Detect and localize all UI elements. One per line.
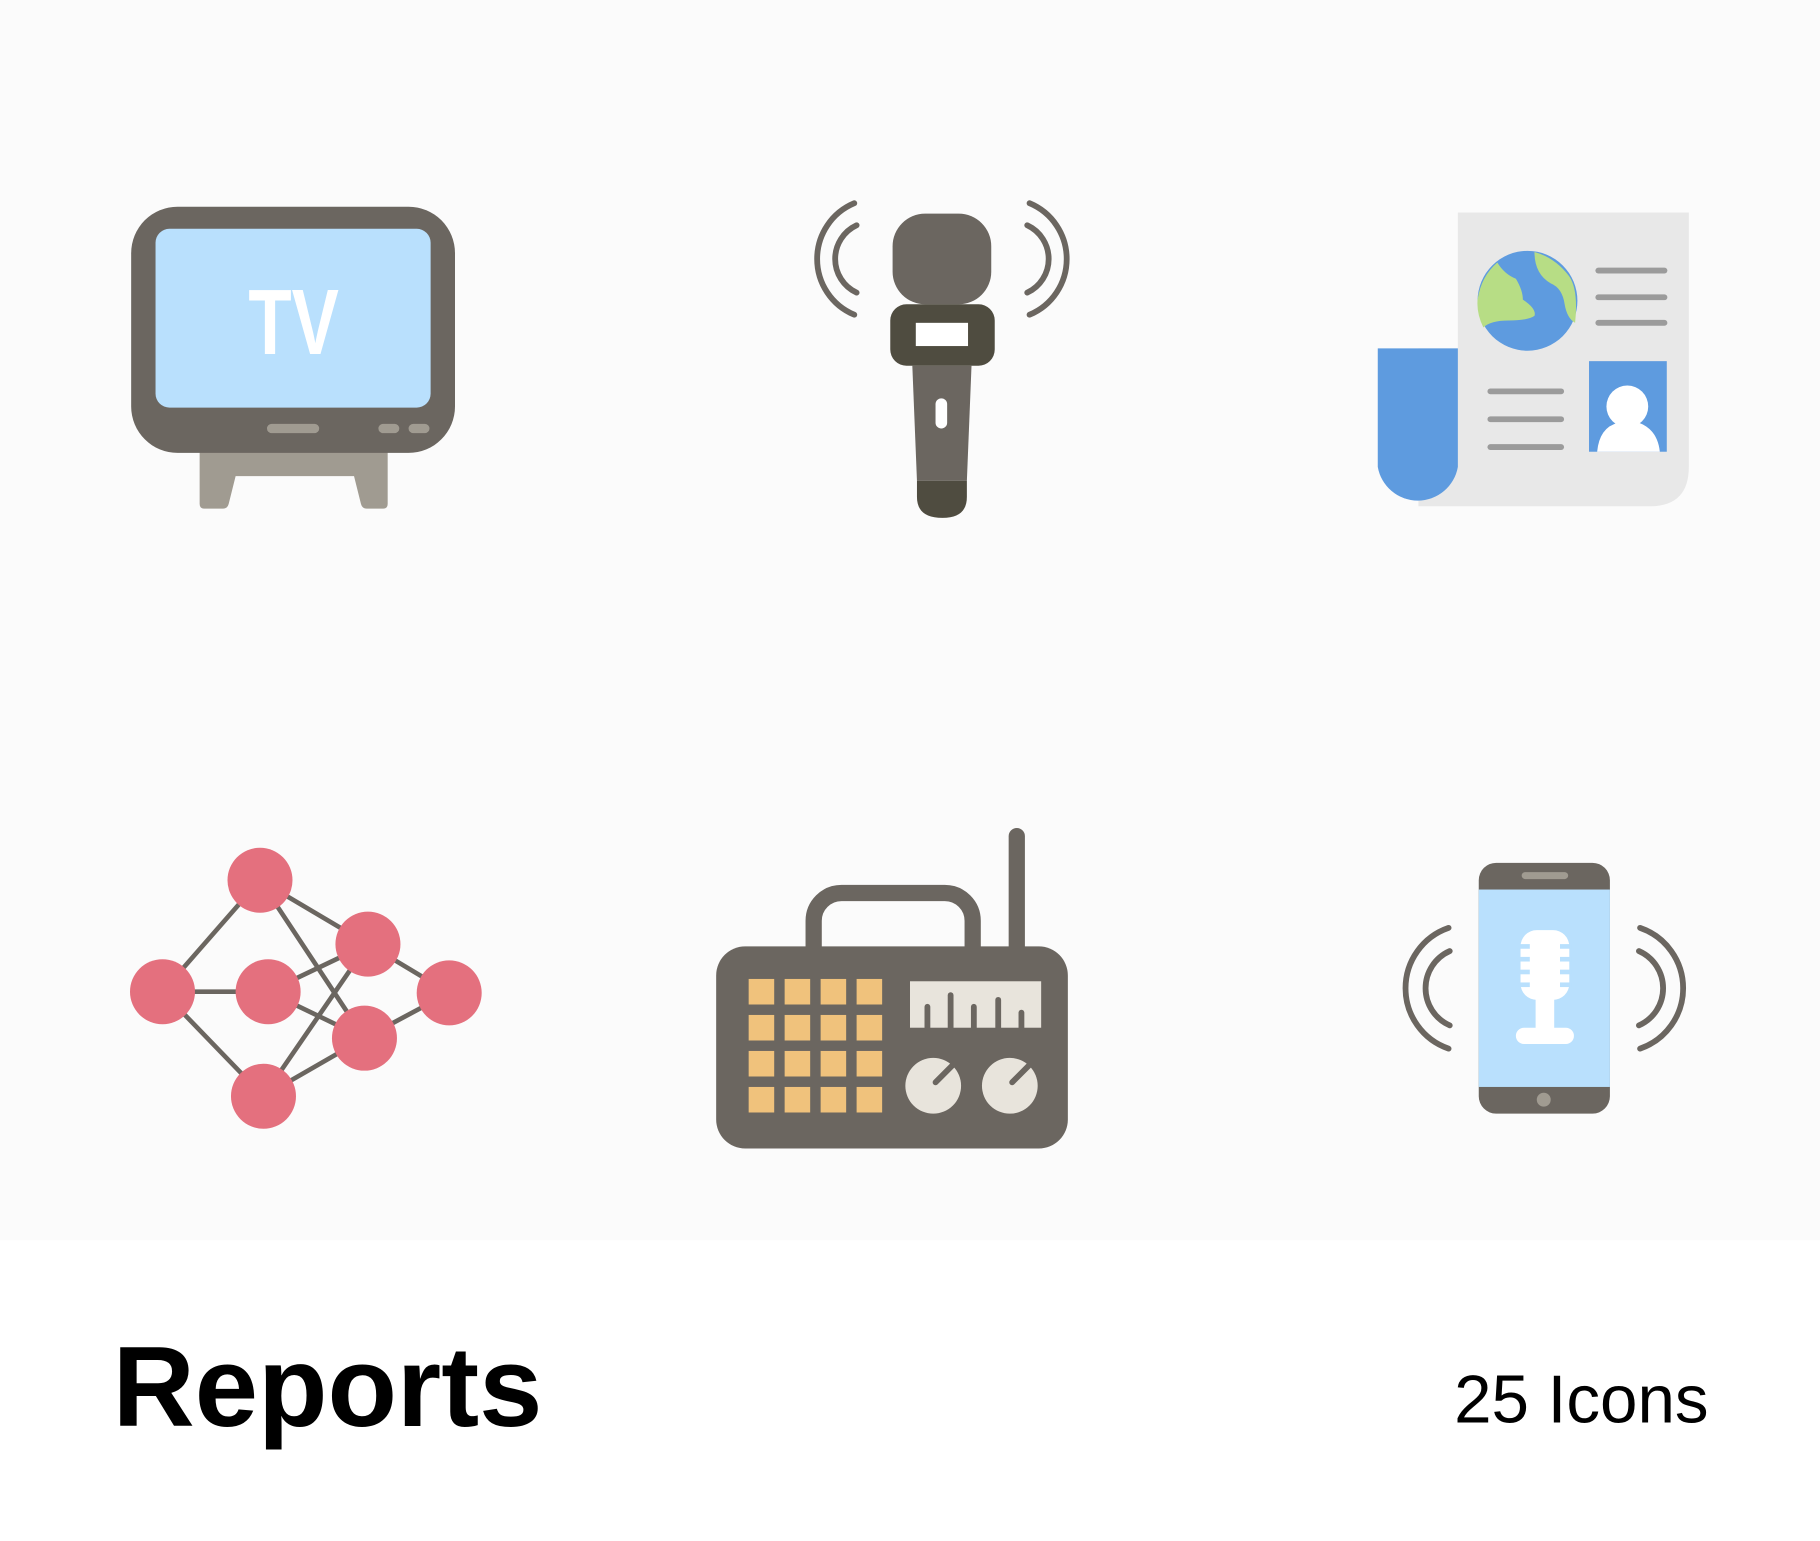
icon: microphone [817, 203, 1067, 518]
icon: TV [131, 207, 455, 509]
icon count label: 25 Icons [1454, 1363, 1709, 1438]
icon: network [130, 848, 482, 1129]
icon: newspaper [1378, 213, 1689, 506]
icon: radio [716, 836, 1068, 1148]
title: Reports [113, 1324, 542, 1451]
icon: phone podcast [1406, 863, 1683, 1114]
icon: TV: TV [248, 270, 339, 374]
